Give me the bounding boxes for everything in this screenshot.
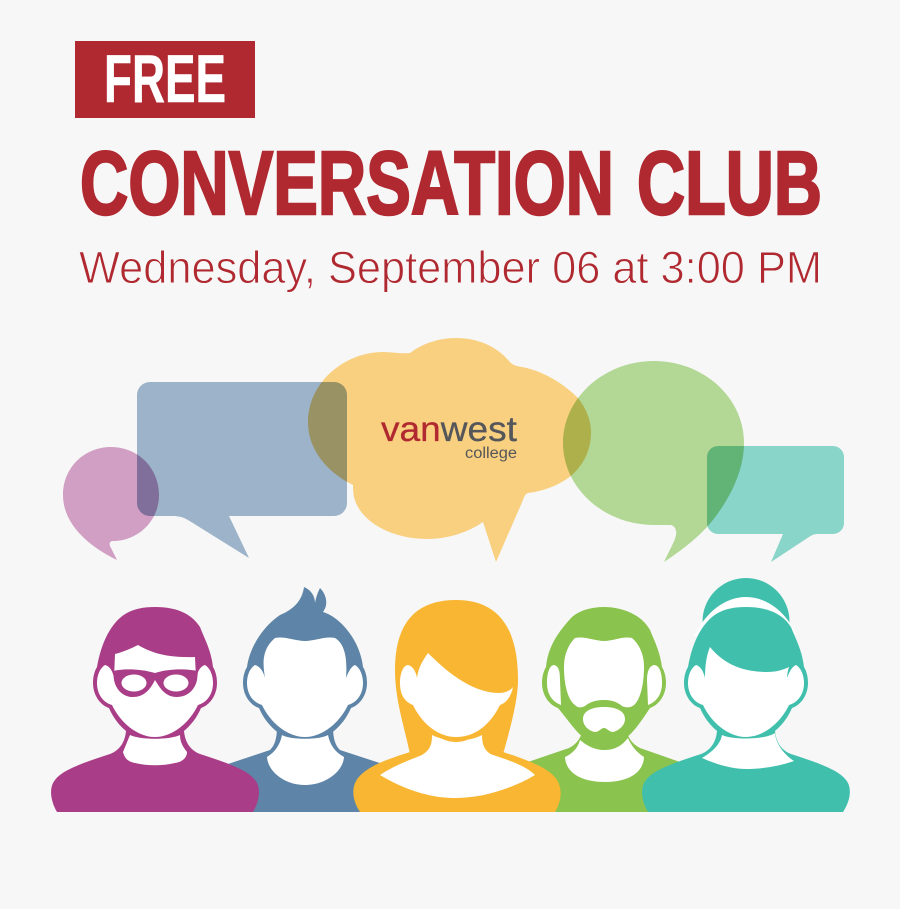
hair bun (702, 578, 790, 665)
face (400, 653, 513, 737)
chin line (413, 705, 500, 742)
body (225, 726, 395, 812)
person: green with beard (525, 607, 680, 812)
bubble: yellow cloud (308, 338, 591, 562)
bubble: green (563, 361, 744, 562)
bubble: blue (137, 382, 347, 558)
person: blue with quiff (225, 587, 395, 812)
face (247, 638, 363, 737)
bubble: teal (707, 446, 844, 562)
chest skin (380, 735, 535, 798)
hair and head (684, 607, 808, 742)
glasses (113, 669, 198, 697)
person: orange with long hair (353, 600, 561, 812)
title: CLUB (637, 134, 822, 234)
hair and head (93, 607, 217, 742)
person: teal with bun (642, 578, 850, 812)
speech bubbles (63, 338, 844, 562)
left ear (547, 665, 561, 705)
logo: vanwest college: vanwest (381, 410, 517, 449)
date and time: Wednesday, September 06 at 3:00 PM (79, 242, 822, 293)
upper face (564, 638, 644, 707)
body (51, 731, 259, 812)
neck skin (565, 738, 644, 782)
hair and head (243, 587, 367, 742)
bubble: purple (63, 447, 159, 560)
face (688, 647, 804, 737)
hair and beard (542, 607, 666, 748)
right ear (647, 665, 662, 705)
body (642, 731, 850, 812)
neck skin (702, 733, 794, 769)
person: purple with glasses (51, 607, 259, 812)
badge: FREE: FREE (104, 41, 226, 117)
face (97, 645, 213, 737)
neck skin (267, 735, 344, 785)
long hair (395, 600, 518, 754)
body (353, 752, 561, 812)
title: CONVERSATION (80, 134, 614, 234)
neck skin (123, 735, 187, 765)
logo: vanwest college: college (465, 445, 517, 462)
mouth (583, 707, 625, 732)
headband (694, 597, 796, 636)
body (525, 727, 680, 812)
